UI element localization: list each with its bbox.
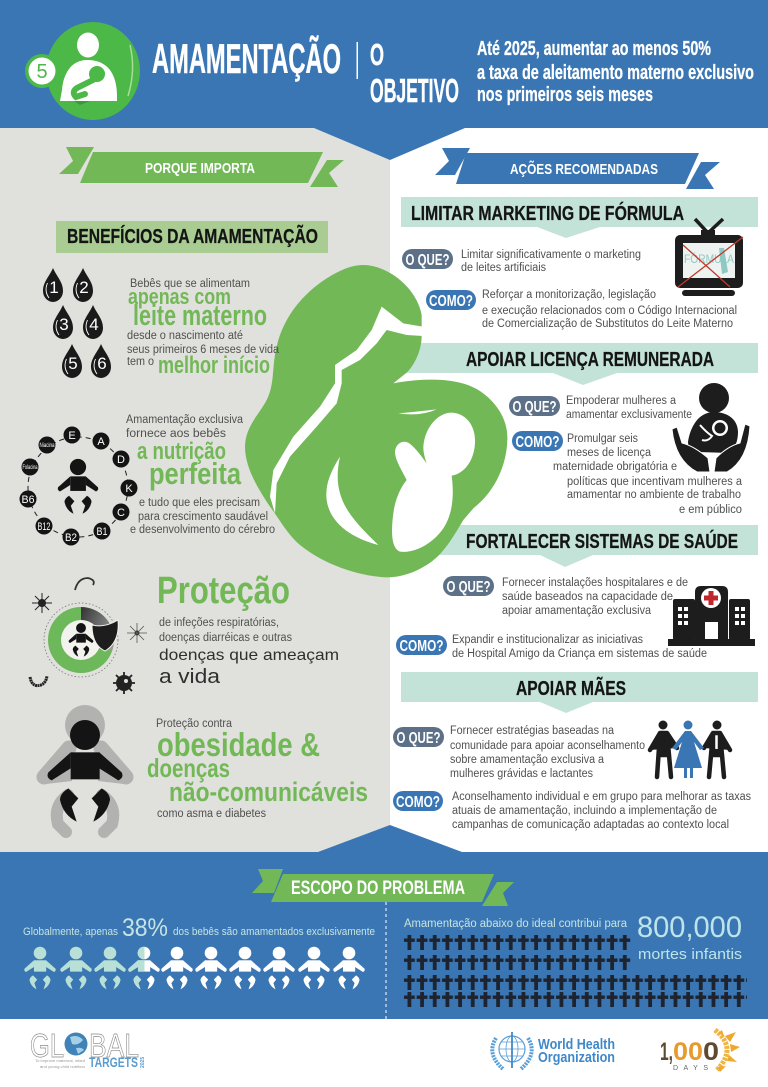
stat: 800,000: 800,000 [637,911,742,944]
text: nutrição perfeita: fornece aos bebês [126,428,226,440]
text: saúde o que: Fornecer instalações hospitalares e de [502,577,688,589]
text: leite materno: tem o [127,356,154,368]
icon: baby with grey halo [44,705,126,832]
logo: world health organization: Organization [538,1049,615,1066]
text: proteção: de infeções respiratórias, [159,617,279,629]
text: saúde como: Expandir e institucionalizar as iniciativas [452,634,643,646]
icons: six drops: 4 [89,315,99,334]
ribbon: escopo do problema [252,869,514,906]
text: leite materno: seus primeiros 6 meses de vida [127,344,280,356]
text: obesidade: como asma e diabetes [157,808,266,820]
heading: benefícios: BENEFÍCIOS DA AMAMENTAÇÃO [67,225,318,248]
text: mães como: campanhas de comunicação adaptadas ao contexto local [452,819,729,831]
text: nutrição perfeita: a nutrição [137,438,226,465]
logo: 1000 days: DAYS [673,1065,708,1072]
text: nutrição perfeita: para crescimento saudável [138,511,268,523]
objective text [477,38,754,106]
pictogram: ten babies [24,947,365,989]
icon: vitamins ring with baby: B6 [22,494,34,506]
icon: vitamins ring with baby: Niacina [40,443,55,449]
text: licença como [553,433,743,516]
objective label: O [370,37,384,72]
text: licença como: Promulgar seis [567,433,638,445]
section bar: apoiar licença [400,343,758,385]
stat: 38%: dos bebês são amamentados exclusivamente [173,926,375,938]
text: leite materno: Bebês que se alimentam [130,278,250,290]
text: nutrição perfeita: Amamentação exclusiva [126,414,244,426]
icon: vitamins ring with baby: D [117,454,125,466]
text: licença como: maternidade obrigatória e [553,461,677,473]
text: nutrição perfeita: e tudo que eles precisam [139,497,260,509]
stat: 800,000: Amamentação abaixo do ideal contribui para [404,918,628,930]
logo: global targets: TARGETS [89,1054,138,1070]
text: licença como: políticas que incentivam mulheres a [567,476,743,488]
icon: television crossed out: FÓRMULA [684,251,734,266]
icon: vitamins ring with baby [20,426,138,546]
icon: vitamins ring with baby: A [97,436,105,448]
text: leite materno: leite materno [133,300,267,332]
icon: vitamins ring with baby: Folacina [22,465,38,471]
text: limitar o que [461,249,641,274]
icon: television crossed out [675,219,743,296]
question pill: saúde o que: O QUE? [446,579,490,596]
stat: 800,000 [404,911,742,963]
question pill: saúde o que [443,576,494,596]
text: limitar como: e execução relacionados com o Código Internacional [482,305,737,317]
text: limitar como [482,289,737,330]
section bar: limitar marketing [401,197,758,238]
logo: 1000 days: 1, [660,1038,673,1066]
icons: six drops: 1 [49,278,59,297]
logo: 1000 days: 0 [703,1038,719,1066]
text: mães como [452,791,751,831]
logo: 1000 days: 0 [673,1038,688,1066]
logo: global targets: To improve maternal, infant [35,1058,86,1063]
text: saúde como [452,634,707,660]
text: proteção [157,570,339,688]
text: nutrição perfeita [126,414,275,536]
text: obesidade: obesidade & [157,726,320,763]
title separator [356,42,358,79]
ribbon: ações recomendadas: AÇÕES RECOMENDADAS [510,160,658,178]
text: mães o que: sobre amamentação exclusiva a [450,754,605,766]
logo: 1000 days: 0 [688,1038,703,1066]
question pill: licença como [512,431,563,451]
question pill: limitar como [426,290,476,310]
question pill: mães o que: O QUE? [396,730,440,747]
question pill: saúde como [396,635,447,655]
text: mães o que: mulheres grávidas e lactantes [450,768,593,780]
text: mães o que [450,725,645,780]
text: saúde como: de Hospital Amigo da Criança em sistemas de saúde [452,648,707,660]
footer [0,1019,768,1087]
text: mães como: atuais de amamentação, incluindo a implementação de [452,805,717,817]
text: saúde o que [502,577,688,617]
logo: global targets: 2025 [140,1057,146,1068]
text: limitar o que: Limitar significativamente o marketing [461,249,641,261]
text: limitar como: de Comercialização de Substitutos do Leite Materno [482,318,733,330]
ribbon: escopo do problema: ESCOPO DO PROBLEMA [291,878,465,899]
heading: benefícios [56,221,328,253]
logo: global targets: BAL [89,1027,139,1064]
text: proteção: a vida [159,666,221,688]
bottom band [0,825,768,1019]
icon: protection shield and germs [30,578,147,694]
text: licença como: meses de licença [567,447,652,459]
header logo: goal 5 badge: 5 [36,61,48,83]
header logo: goal 5 badge [25,22,140,120]
question pill: limitar o que: O QUE? [406,252,450,269]
ribbon: porque importa [59,147,344,187]
icon: vitamins ring with baby: B2 [65,532,77,544]
question pill: mães o que [393,727,444,747]
pictogram: crosses [403,935,747,1007]
text: saúde o que: apoiar amamentação exclusiva [502,605,652,617]
stat: 38%: Globalmente, apenas [23,926,118,938]
text: leite materno: melhor início [158,352,270,379]
section bar: limitar marketing: LIMITAR MARKETING DE FÓRMULA [411,201,684,225]
logo: 1000 days [660,1030,740,1072]
objective label [370,37,459,109]
text: obesidade: doenças [147,753,230,783]
text: licença o que [566,395,692,421]
icon: vitamins ring with baby: K [125,483,133,495]
text: licença o que: amamentar exclusivamente [566,409,692,421]
question pill: mães como [393,791,443,811]
question pill: saúde como: COMO? [400,638,444,655]
stat: 38% [23,914,375,942]
icon: vitamins ring with baby: B12 [38,521,50,533]
text: licença o que: Empoderar mulheres a [566,395,677,407]
objective label: OBJETIVO [370,72,459,109]
text: licença como: e em público [679,504,742,516]
section bar: fortalecer sistemas [420,525,758,567]
text: mães o que: comunidade para apoiar aconselhamento [450,740,645,752]
stat: 38%: 38% [122,914,168,942]
text: leite materno: desde o nascimento até [127,330,243,342]
text: leite materno [127,278,280,379]
icons: six drops [43,268,111,378]
section bar: apoiar mães [401,672,758,713]
text: mães como: Aconselhamento individual e em grupo para melhorar as taxas [452,791,751,803]
ribbon: ações recomendadas [435,148,720,189]
icon: vitamins ring with baby: E [68,430,76,442]
text: proteção: Proteção [157,570,290,612]
background: right white panel [390,128,768,852]
text: nutrição perfeita: e desenvolvimento do cérebro [130,524,275,536]
question pill: licença como: COMO? [516,434,560,451]
text: leite materno: apenas com [128,284,231,309]
objective text: nos primeiros seis meses [477,84,653,106]
icons: six drops: 2 [79,278,89,297]
ribbon: porque importa: PORQUE IMPORTA [145,160,255,177]
text: saúde o que: saúde baseados na capacidade de [502,591,673,603]
logo: global targets: and young child nutrition [40,1064,85,1069]
background: left grey panel [0,128,390,852]
icon: mother and baby in hands [672,383,750,472]
icon: vitamins ring with baby: C [117,507,125,519]
text: proteção: doenças que ameaçam [159,647,339,664]
header band [0,0,768,160]
icon: vitamins ring with baby: B1 [96,526,108,538]
text: licença como: amamentar no ambiente de trabalho [567,489,741,501]
stat: 800,000: mortes infantis [638,946,742,963]
logo: world health organization [492,1032,615,1069]
text: nutrição perfeita: perfeita [149,456,242,491]
dashed divider [385,902,387,1019]
text: limitar como: Reforçar a monitorização, legislação [482,289,656,301]
text: mães o que: Fornecer estratégias baseadas na [450,725,615,737]
icons: six drops: 5 [68,354,78,373]
question pill: licença o que [509,396,560,416]
text: obesidade [147,718,368,820]
illustration: mother and baby [245,265,507,577]
logo: global targets [30,1027,146,1070]
question pill: mães como: COMO? [396,794,440,811]
text: proteção: doenças diarréicas e outras [159,632,292,644]
icons: six drops: 3 [59,315,69,334]
question pill: limitar como: COMO? [429,293,473,310]
question pill: licença o que: O QUE? [512,399,556,416]
text: limitar o que: de leites artificiais [461,262,546,274]
logo: world health organization: World Health [538,1036,615,1053]
icon: hospital [668,586,755,646]
section bar: apoiar mães: APOIAR MÃES [516,677,626,700]
icon: three people holding hands [650,720,730,778]
logo: global targets: GL [30,1027,64,1064]
text: obesidade: Proteção contra [156,718,233,730]
text: obesidade: não-comunicáveis [169,777,368,807]
title: AMAMENTAÇÃO [152,35,341,82]
question pill: limitar o que [402,249,453,269]
icons: six drops: 6 [97,354,107,373]
